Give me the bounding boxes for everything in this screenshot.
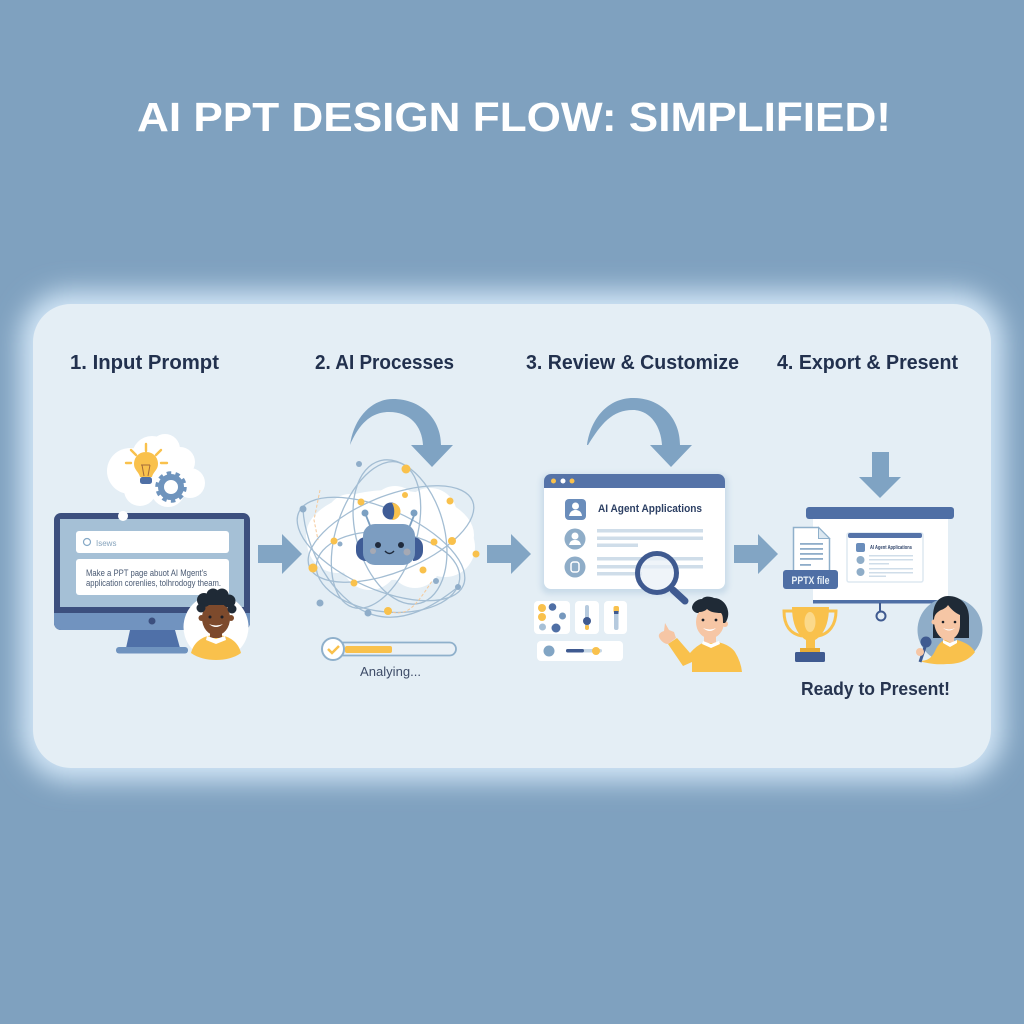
progress label: Analying... (360, 664, 421, 679)
icon: PPTX file (783, 528, 838, 589)
customization controls (534, 601, 627, 661)
icon: curved arrow step 2 (350, 399, 453, 467)
projector screen (806, 507, 954, 620)
robot (356, 502, 423, 565)
icon: presenter avatar (916, 596, 982, 664)
prompt text box: application corenlies, tolhrodogy theam. (86, 578, 221, 588)
list icons (564, 499, 586, 578)
icon: person pointing (659, 597, 742, 672)
progress bar (322, 638, 456, 660)
arrow: step 1 to 2 (258, 534, 302, 574)
placeholder lines (597, 529, 703, 576)
icon: PPTX file: PPTX file (792, 575, 830, 587)
prompt text box (76, 559, 229, 595)
prompt text box: Make a PPT page abuot AI Mgent's (86, 568, 207, 578)
window heading: AI Agent Applications (598, 503, 702, 515)
icon: desktop monitor with prompt (54, 511, 250, 654)
app window mockup (541, 474, 728, 594)
heading: step 2: 2. AI Processes (315, 352, 454, 374)
nodes (308, 464, 480, 615)
panel: flow container (20, 291, 1004, 781)
search box (76, 531, 229, 553)
icon: magnifying glass (638, 554, 685, 601)
search box: Isews (96, 539, 116, 548)
icon: trophy (784, 607, 836, 662)
icon: user avatar 1 (184, 588, 248, 660)
arrow: step 3 to 4 (734, 534, 778, 574)
icon: down arrow step 4 (859, 452, 901, 498)
mini slide (847, 533, 923, 582)
icon: curved arrow step 3 (587, 398, 692, 467)
cloud (306, 486, 475, 590)
heading: step 4: 4. Export & Present (777, 352, 958, 374)
mini slide: AI Agent Applications (870, 545, 912, 551)
title: AI PPT DESIGN FLOW: SIMPLIFIED! (137, 94, 891, 140)
heading: step 3: 3. Review & Customize (526, 352, 739, 374)
orbits (283, 449, 487, 622)
icon: thought cloud with bulb and gear (107, 434, 205, 521)
arrow: step 2 to 3 (487, 534, 531, 574)
caption: ready to present: Ready to Present! (801, 679, 950, 699)
illustration: AI network and robot (283, 449, 487, 622)
heading: step 1: 1. Input Prompt (70, 352, 219, 374)
